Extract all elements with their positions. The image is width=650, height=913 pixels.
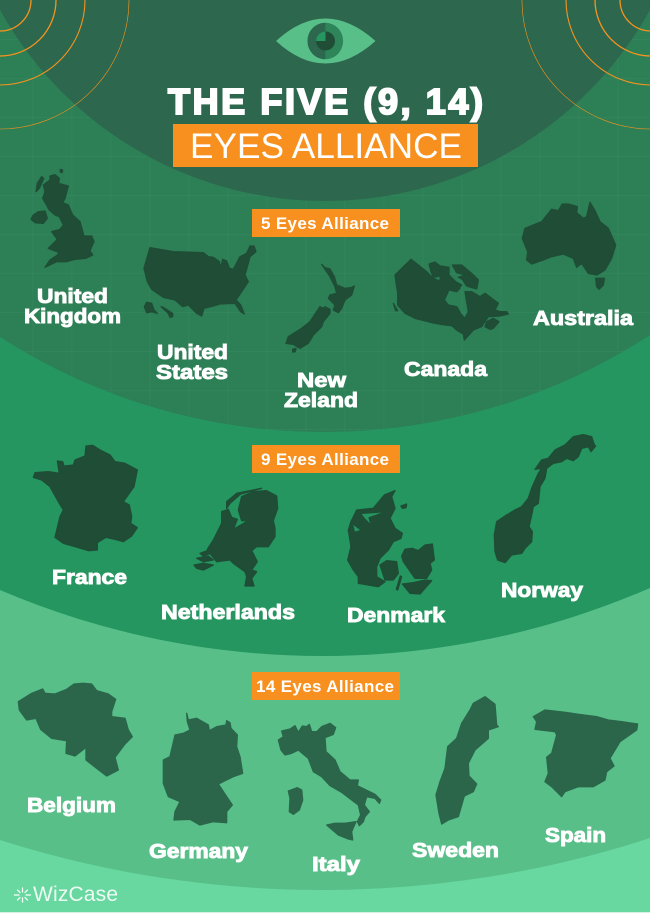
map: Germany	[163, 713, 243, 825]
label: Australia: Australia	[533, 308, 634, 330]
footer edge strip	[0, 912, 650, 913]
heading: 5 Eyes Alliance: 5 Eyes Alliance	[261, 214, 389, 233]
title banner: EYES ALLIANCE	[190, 127, 462, 166]
map: Denmark	[348, 491, 434, 594]
label: United States: States	[156, 362, 228, 384]
concentric signal arcs, right	[522, 0, 650, 129]
label: Italy: Italy	[312, 854, 361, 876]
panel: 14 Eyes countries	[18, 683, 638, 876]
label: France: France	[52, 567, 127, 589]
label: Germany: Germany	[149, 841, 249, 863]
panel: 5 Eyes countries	[24, 169, 634, 412]
label: New Zeland	[284, 370, 358, 412]
label: United Kingdom: United	[37, 286, 108, 308]
logo: WizCase: WizCase	[33, 883, 118, 906]
map: United Kingdom	[31, 169, 94, 267]
panel: 14 Eyes band	[0, 588, 650, 913]
icon: eye	[276, 18, 376, 64]
icon: WizCase spark	[14, 888, 30, 902]
label: United States	[156, 342, 228, 384]
heading: 5 Eyes Alliance	[252, 209, 400, 237]
title: THE FIVE (9, 14)	[168, 81, 483, 122]
heading: 14 Eyes Alliance	[252, 672, 400, 700]
label: New Zeland: Zeland	[284, 390, 358, 412]
map: Spain	[533, 710, 638, 797]
label: Netherlands: Netherlands	[161, 602, 295, 624]
map: Netherlands	[194, 488, 278, 586]
label: Sweden: Sweden	[412, 840, 499, 862]
concentric signal arcs, left	[0, 0, 129, 129]
panel: header dark circle	[0, 0, 650, 201]
panel: 9 Eyes band	[0, 335, 650, 913]
heading: 14 Eyes Alliance: 14 Eyes Alliance	[256, 677, 394, 696]
label: Norway: Norway	[501, 580, 584, 602]
map: Canada	[393, 259, 508, 340]
heading: 9 Eyes Alliance: 9 Eyes Alliance	[261, 450, 389, 469]
panel: footer band	[0, 838, 650, 913]
label: United Kingdom: Kingdom	[24, 306, 121, 328]
label: New Zeland: New	[297, 370, 347, 392]
label: United States: United	[157, 342, 228, 364]
heading: 9 Eyes Alliance	[252, 445, 400, 473]
map: France	[33, 445, 137, 551]
map: Sweden	[436, 697, 498, 824]
label: Canada: Canada	[404, 359, 488, 381]
map: Australia	[522, 202, 616, 289]
map: Norway	[494, 435, 596, 563]
map: New Zealand	[286, 264, 354, 352]
map: United States	[144, 246, 256, 317]
label: Belgium: Belgium	[27, 795, 116, 817]
map: Italy	[278, 723, 381, 840]
map: Belgium	[18, 683, 132, 776]
panel: 9 Eyes countries	[33, 435, 596, 627]
label: United Kingdom	[24, 286, 121, 328]
label: Denmark: Denmark	[347, 605, 446, 627]
label: Spain: Spain	[545, 825, 606, 847]
